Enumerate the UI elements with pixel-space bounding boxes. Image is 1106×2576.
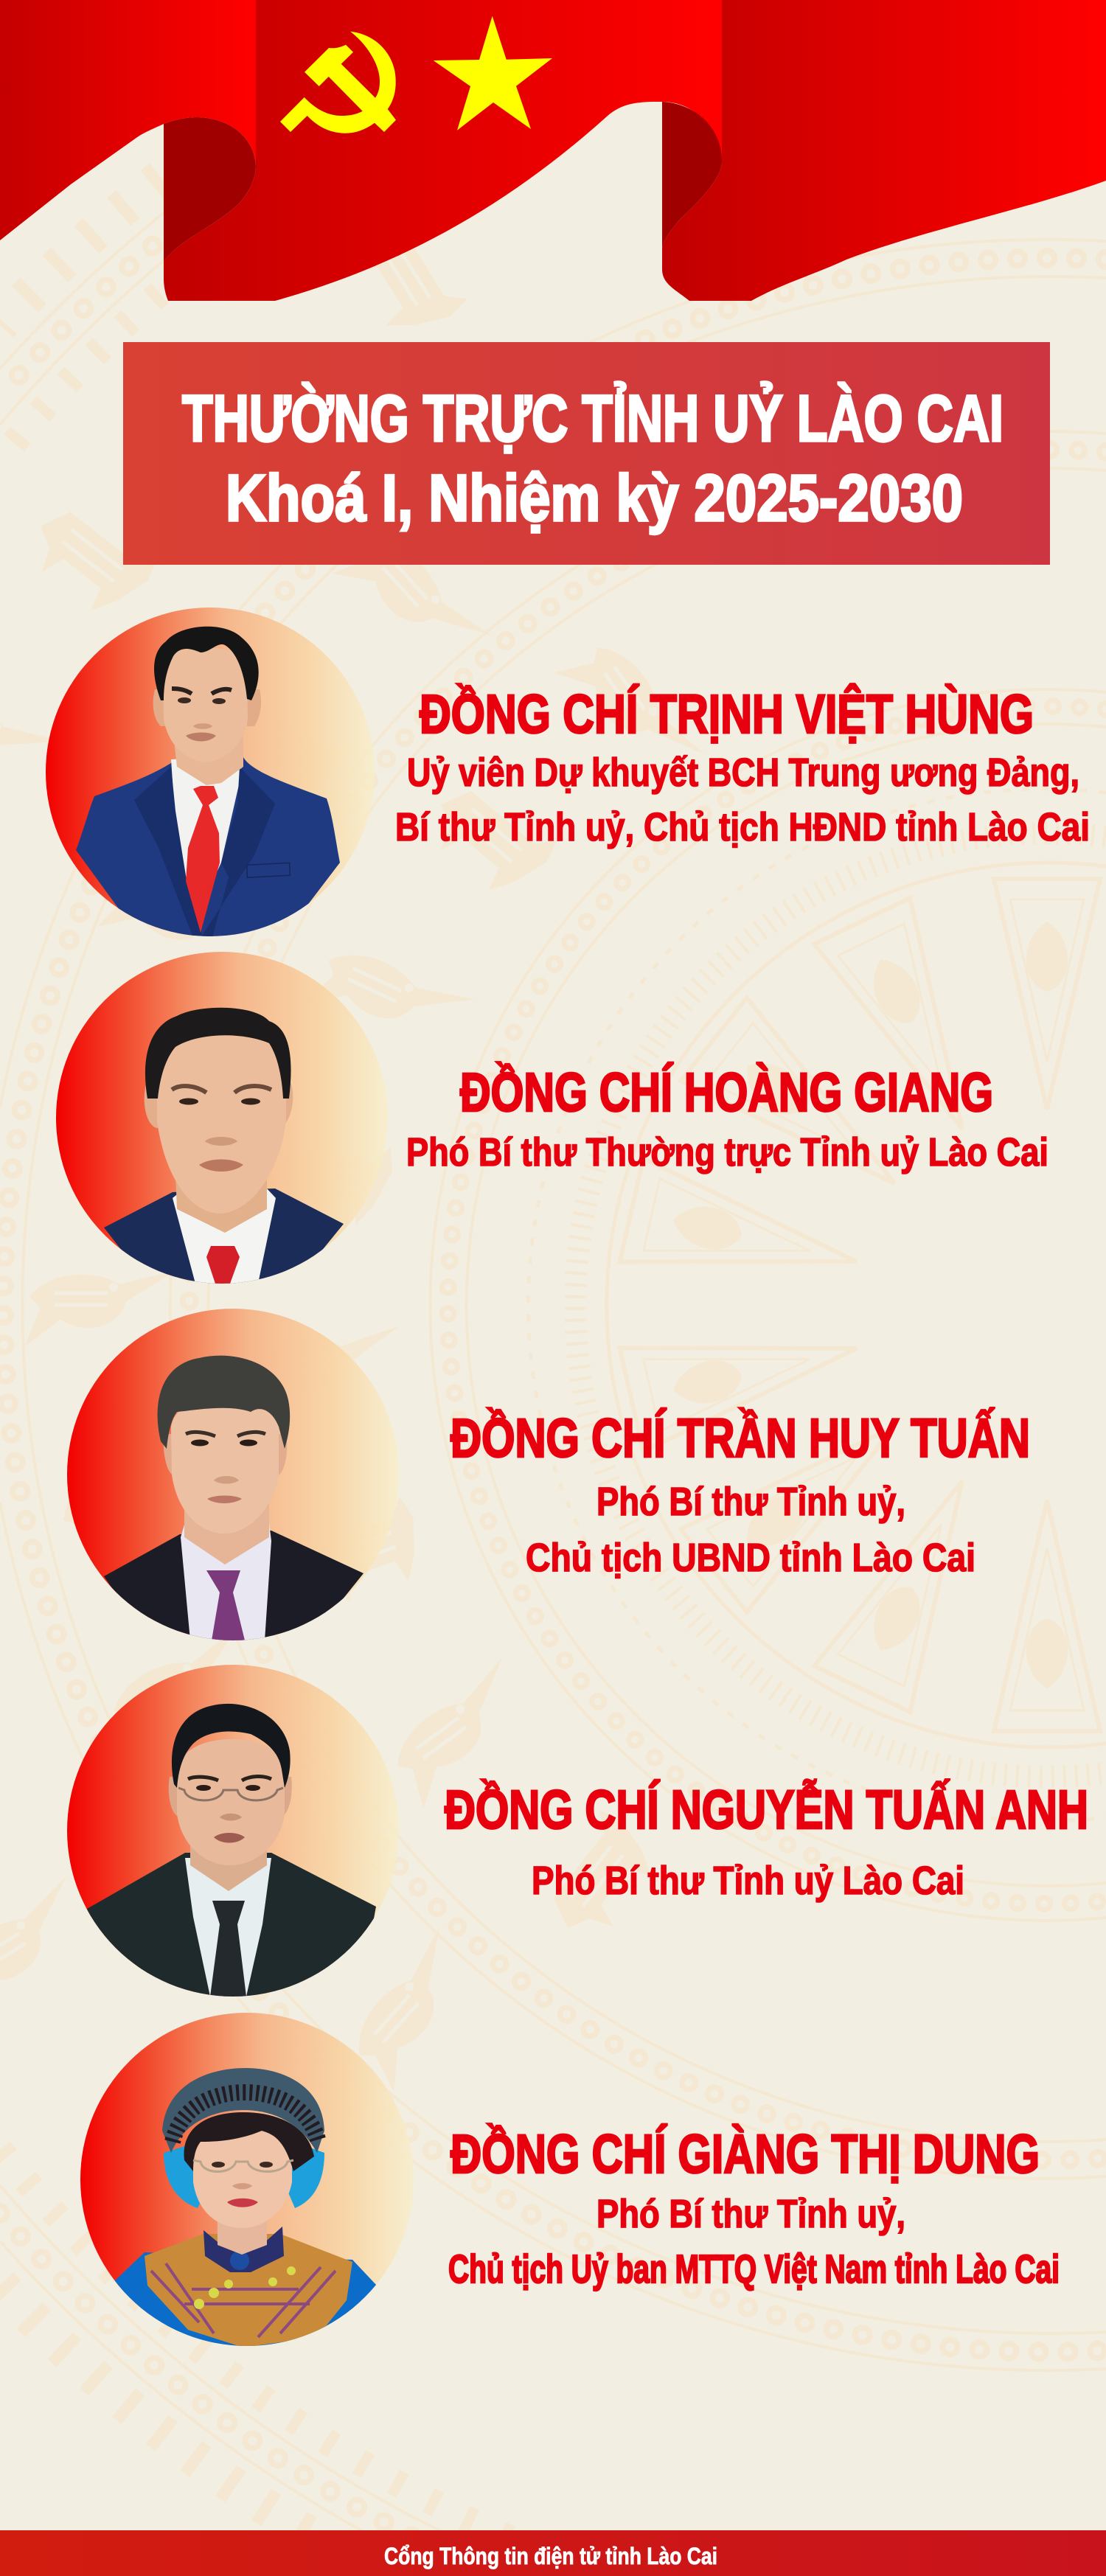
portrait 3: Trần Huy Tuấn [67,1309,399,1640]
footer bar [0,2530,1106,2576]
title line 2: Khoá I, Nhiệm kỳ 2025-2030 [226,461,963,535]
banner: red flag ribbon [0,0,1106,301]
footer text: Cổng Thông tin điện tử tỉnh Lào Cai [384,2543,717,2569]
person 3 role line 1: Phó Bí thư Tỉnh uỷ, [597,1480,905,1524]
person 5 role line 1: Phó Bí thư Tỉnh uỷ, [597,2192,905,2236]
person 3 role line 2: Chủ tịch UBND tỉnh Lào Cai [526,1536,975,1580]
portrait 5: Giàng Thị Dung [80,2013,414,2347]
person 4 role: Phó Bí thư Tỉnh uỷ Lào Cai [532,1859,964,1903]
portrait 1: Trịnh Việt Hùng [46,608,375,944]
icon: yellow star [434,16,552,130]
title box [123,342,1050,565]
banner fold: left shadow [164,117,256,262]
portrait 4: Nguyễn Tuấn Anh [67,1665,399,1998]
icon: hammer and sickle [280,32,396,133]
banner fold: right shadow [662,102,722,248]
portrait 2: Hoàng Giang [56,952,388,1284]
